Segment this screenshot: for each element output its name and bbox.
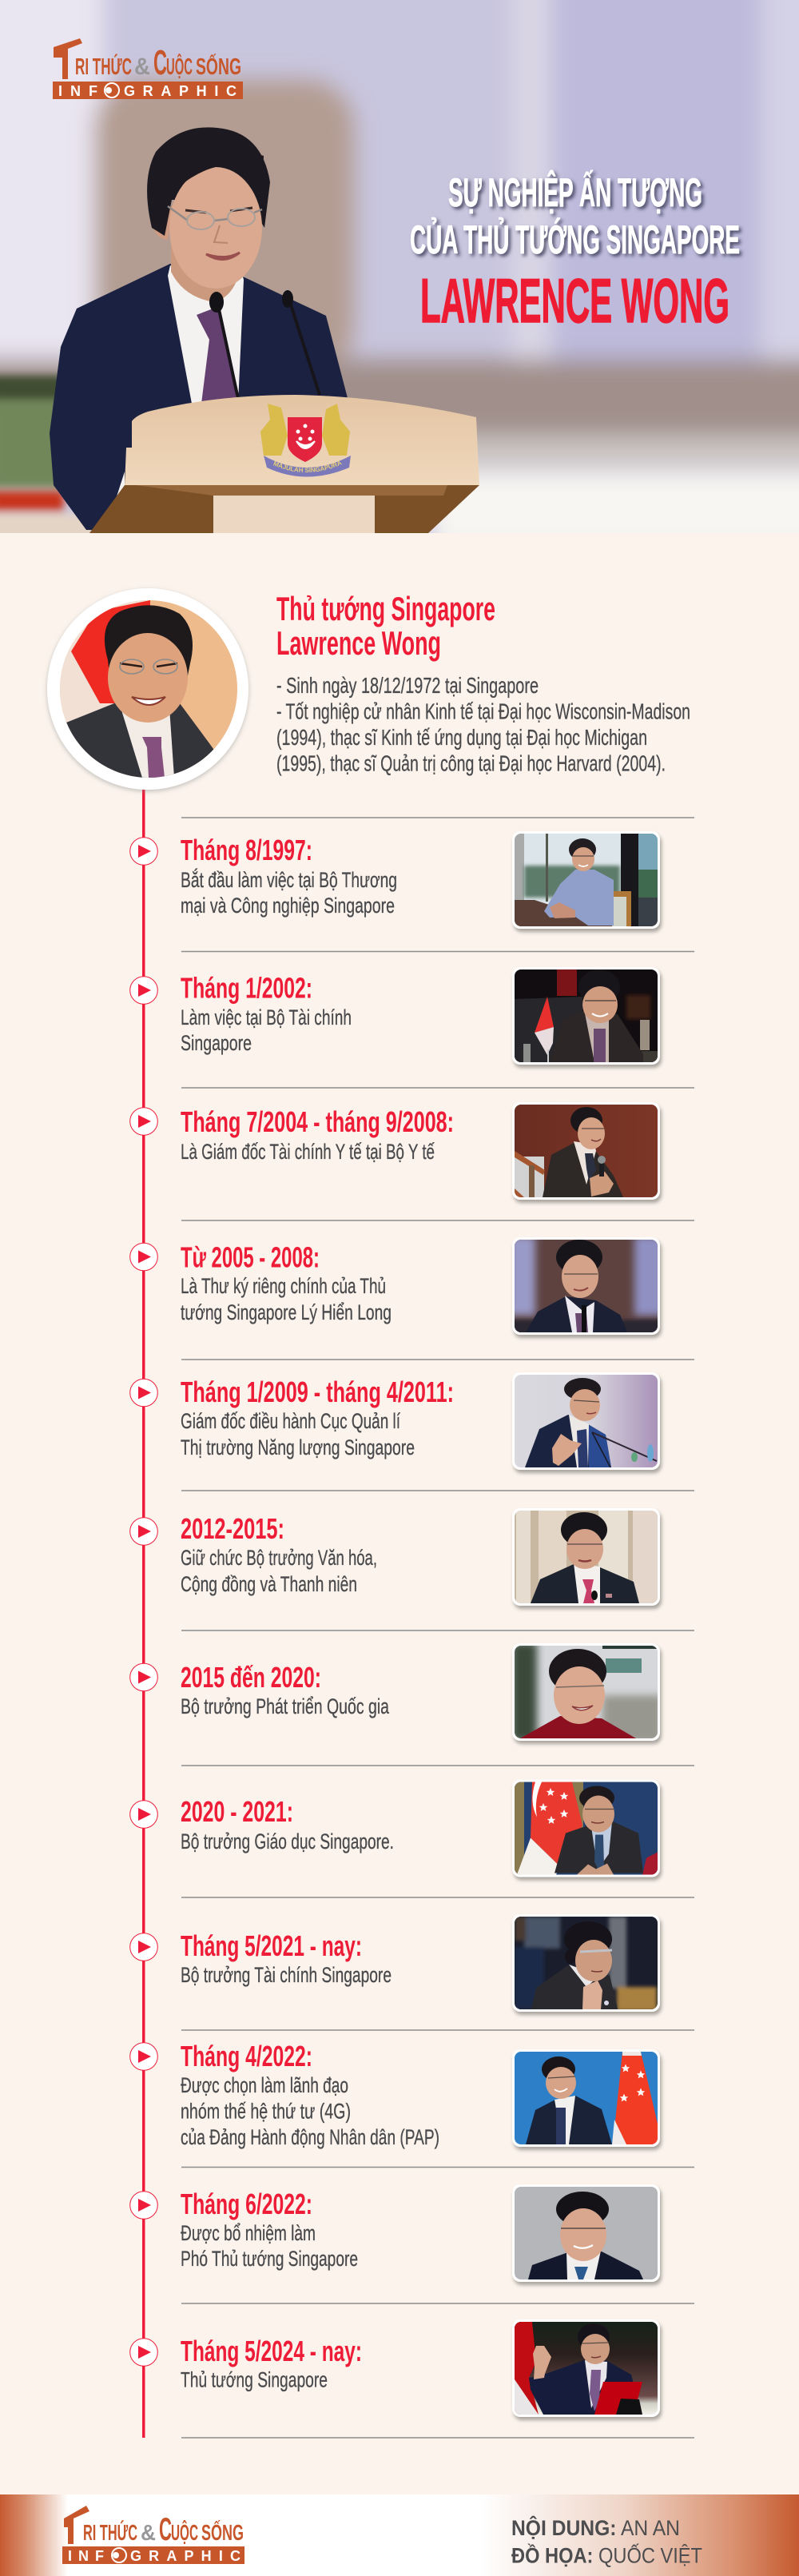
photo	[512, 2184, 662, 2285]
logo: Tri Thức & Cuộc Sống Infographic: INF	[58, 83, 97, 99]
marker icon	[130, 1243, 157, 1271]
marker icon	[130, 1108, 157, 1135]
timeline item: Tháng 6/2022	[130, 2184, 662, 2285]
profile heading: Thủ tướng Singapore	[276, 590, 495, 627]
icon: Singapore coat of arms: MAJULAH SINGAPURA	[273, 460, 342, 472]
photo	[512, 2319, 662, 2420]
heading: 2012-2015:	[181, 1512, 284, 1545]
heading: Tháng 1/2009 - tháng 4/2011:	[181, 1376, 454, 1408]
photo	[508, 1236, 665, 1338]
description: Được bổ nhiệm làm	[181, 2221, 316, 2245]
blurred hall background	[0, 0, 799, 551]
photo	[512, 1102, 662, 1203]
profile portrait	[47, 588, 248, 791]
title	[410, 170, 740, 336]
marker icon	[130, 838, 157, 865]
footer logo: INF	[68, 2548, 104, 2564]
description: Cộng đồng và Thanh niên	[181, 1572, 357, 1596]
heading: Tháng 8/1997:	[181, 834, 312, 866]
marker icon	[130, 1933, 157, 1961]
logo: Tri Thức & Cuộc Sống Infographic	[53, 38, 243, 99]
description: Singapore	[181, 1031, 252, 1055]
description	[181, 1005, 352, 1055]
credits: ĐỒ HỌA: QUỐC VIỆT	[511, 2542, 702, 2567]
speaker figure	[50, 127, 352, 533]
marker icon	[130, 2043, 157, 2070]
logo: Tri Thức & Cuộc Sống Infographic: &	[134, 54, 150, 80]
footer band	[0, 2494, 799, 2576]
description: Giữ chức Bộ trưởng Văn hóa,	[181, 1546, 377, 1570]
footer logo: GRAPHIC	[130, 2548, 240, 2564]
footer logo: RI THỨC	[83, 2520, 137, 2545]
description: Được chọn làm lãnh đạo	[181, 2073, 348, 2097]
description: Bộ trưởng Tài chính Singapore	[181, 1963, 392, 1987]
description	[181, 1546, 377, 1596]
logo: Tri Thức & Cuộc Sống Infographic: C	[153, 43, 167, 82]
photo	[512, 1372, 662, 1473]
timeline item: 2015 đến 2020	[130, 1642, 662, 1744]
heading: Từ 2005 - 2008:	[181, 1240, 320, 1274]
logo: Tri Thức & Cuộc Sống Infographic: UỘC	[166, 53, 193, 80]
timeline item: 2020 - 2021	[130, 1779, 662, 1880]
heading: Tháng 5/2021 - nay:	[181, 1929, 362, 1962]
marker icon	[130, 1801, 157, 1828]
description: Bộ trưởng Giáo dục Singapore.	[181, 1829, 394, 1853]
photo	[512, 1508, 662, 1609]
description: của Đảng Hành động Nhân dân (PAP)	[181, 2125, 439, 2149]
profile details: - Sinh ngày 18/12/1972 tại Singapore	[276, 673, 539, 698]
description: tướng Singapore Lý Hiển Long	[181, 1300, 392, 1324]
marker icon	[130, 2339, 157, 2366]
timeline item: Tháng 1/2002	[130, 967, 662, 1068]
description: Là Thư ký riêng chính của Thủ	[181, 1274, 386, 1298]
marker icon	[130, 1663, 157, 1691]
logo: Tri Thức & Cuộc Sống Infographic: SỐNG	[196, 53, 241, 80]
timeline item: Tháng 7/2004 - tháng 9/2008	[130, 1102, 662, 1203]
description: Phó Thủ tướng Singapore	[181, 2247, 358, 2271]
description	[181, 2073, 439, 2149]
profile heading: Lawrence Wong	[276, 624, 441, 662]
description	[181, 867, 397, 918]
photo	[512, 967, 662, 1068]
timeline item: Tháng 8/1997	[130, 831, 662, 932]
timeline item: Từ 2005 - 2008	[130, 1236, 665, 1338]
footer logo: SỐNG	[201, 2519, 244, 2545]
description: Bộ trưởng Phát triển Quốc gia	[181, 1694, 390, 1718]
marker icon	[130, 1379, 157, 1407]
heading: 2015 đến 2020:	[181, 1661, 321, 1694]
credits	[511, 2515, 702, 2567]
profile heading	[276, 590, 495, 662]
footer logo: &	[141, 2520, 156, 2545]
description: Thủ tướng Singapore	[181, 2367, 328, 2391]
description: Bắt đầu làm việc tại Bộ Thương	[181, 867, 397, 892]
heading: Tháng 6/2022:	[181, 2188, 312, 2220]
podium	[89, 395, 479, 533]
timeline item: Tháng 5/2024 - nay	[130, 2319, 662, 2420]
footer logo: UỘC	[171, 2519, 198, 2545]
profile details	[276, 673, 690, 775]
photo	[512, 2049, 662, 2150]
photo	[512, 831, 662, 932]
description: Làm việc tại Bộ Tài chính	[181, 1005, 352, 1029]
credits: NỘI DUNG: AN AN	[511, 2515, 680, 2540]
description: mại và Công nghiệp Singapore	[181, 894, 395, 918]
logo: Tri Thức & Cuộc Sống Infographic: RI THỨC	[75, 53, 132, 80]
timeline item: Tháng 1/2009 - tháng 4/2011	[130, 1372, 662, 1473]
photo	[512, 1914, 662, 2015]
icon: Singapore coat of arms	[260, 404, 351, 476]
heading: Tháng 4/2022:	[181, 2040, 312, 2072]
marker icon	[130, 977, 157, 1004]
timeline line	[142, 787, 145, 2438]
heading: Tháng 1/2002:	[181, 972, 312, 1005]
header photo: Lawrence Wong at the podium	[0, 0, 799, 533]
description	[181, 1409, 415, 1459]
timeline item: Tháng 5/2021 - nay	[130, 1914, 662, 2015]
description	[181, 1274, 392, 1324]
marker icon	[130, 1518, 157, 1545]
description	[181, 2221, 358, 2271]
footer logo	[62, 2506, 244, 2564]
timeline item: 2012-2015	[130, 1508, 662, 1609]
description: Thị trường Năng lượng Singapore	[181, 1435, 415, 1459]
description: nhóm thế hệ thứ tư (4G)	[181, 2099, 351, 2123]
footer logo: C	[159, 2512, 172, 2547]
marker icon	[130, 2192, 157, 2219]
photo	[511, 1642, 662, 1744]
heading: 2020 - 2021:	[181, 1795, 293, 1828]
description: Giám đốc điều hành Cục Quản lí	[181, 1409, 400, 1433]
description: Là Giám đốc Tài chính Y tế tại Bộ Y tế	[181, 1140, 435, 1164]
profile details: (1994), thạc sĩ Kinh tế ứng dụng tại Đại học Michigan	[276, 725, 647, 750]
heading: Tháng 7/2004 - tháng 9/2008:	[181, 1105, 454, 1138]
timeline item: Tháng 4/2022	[130, 2040, 662, 2150]
photo	[512, 1779, 662, 1880]
logo: Tri Thức & Cuộc Sống Infographic: GRAPHIC	[124, 83, 237, 99]
heading: Tháng 5/2024 - nay:	[181, 2335, 362, 2367]
